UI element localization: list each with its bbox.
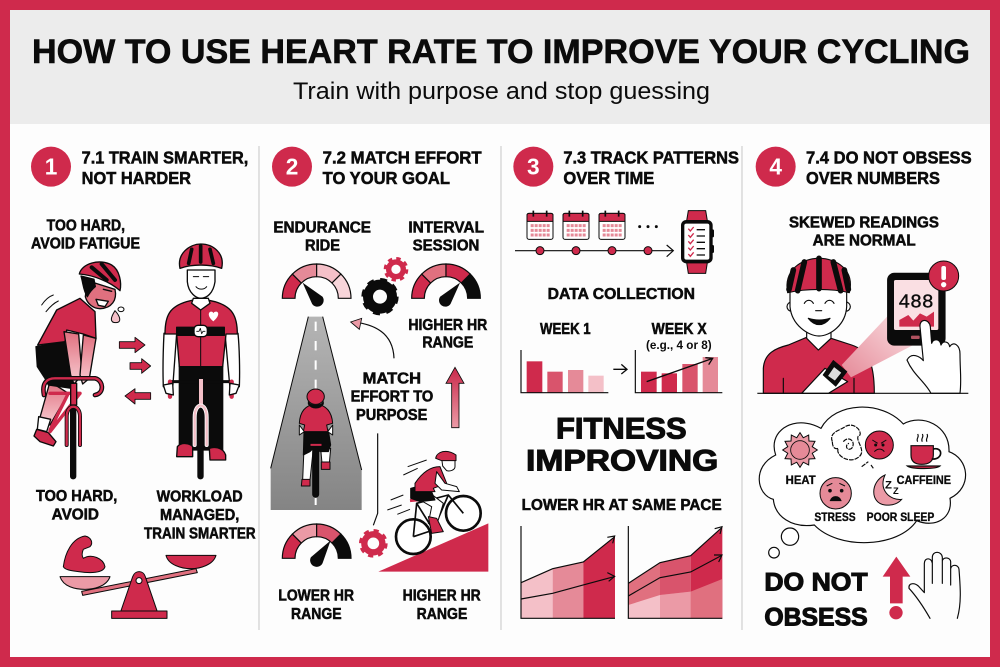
label: skewed readings (789, 214, 939, 250)
label: week x: (e.g., 4 or 8) (646, 338, 712, 352)
icon: sun (783, 433, 817, 467)
label: data collection: DATA COLLECTION (548, 286, 695, 303)
panel: 7.4 do not obsess (756, 147, 972, 632)
ellipsis (640, 222, 657, 231)
step badge 4: 4 (769, 154, 782, 180)
heading 2 (323, 147, 482, 188)
heading 1: 7.1 TRAIN SMARTER, (82, 147, 248, 167)
label: higher hr range top: HIGHER HR (408, 317, 487, 334)
label: caffeine: CAFFEINE (897, 473, 951, 487)
icon: gears (364, 259, 407, 313)
arrow: up (446, 367, 464, 428)
title: HOW TO USE HEART RATE TO IMPROVE YOUR CYCLING (32, 33, 970, 71)
panel: 7.1 train smarter (31, 147, 256, 618)
label: higher hr range bottom: HIGHER HR (403, 588, 481, 605)
icon: smartwatch checklist (681, 211, 714, 273)
headline: fitness improving: FITNESS (556, 412, 687, 445)
headline: fitness improving (526, 412, 718, 478)
heading 2: 7.2 MATCH EFFORT (323, 147, 482, 167)
step badge 3 (513, 147, 553, 187)
icon: exclamation arrow (883, 557, 910, 619)
label: endurance ride: ENDURANCE (273, 219, 371, 236)
connector line (373, 433, 378, 525)
label: week 1: WEEK 1 (540, 321, 591, 338)
road (271, 317, 362, 510)
arrow: curved to endurance (351, 318, 394, 358)
label: week x: WEEK X (652, 321, 707, 338)
sleep letters: Z (885, 479, 892, 491)
label: too hard avoid: TOO HARD, (36, 488, 117, 505)
thought cloud (759, 407, 966, 558)
sleep letters: Z (893, 486, 899, 496)
label: workload managed: MANAGED, (160, 507, 239, 524)
label: too hard avoid fatigue: TOO HARD, (47, 218, 125, 235)
icon: red gear (361, 531, 386, 556)
label: match effort to purpose: MATCH (363, 370, 421, 387)
label: match effort to purpose: EFFORT TO (351, 389, 433, 406)
icon: hill climbing rider (378, 451, 488, 572)
arrows between cyclists (119, 337, 151, 404)
gauge: lower hr (282, 524, 351, 566)
label: lower hr range (278, 588, 354, 623)
label: match effort to purpose (351, 370, 433, 424)
heading 3: OVER TIME (563, 168, 655, 188)
label: lower hr range: RANGE (291, 606, 342, 623)
headline: fitness improving: IMPROVING (526, 445, 718, 478)
icon: moon (874, 475, 902, 505)
label: skewed readings: SKEWED READINGS (789, 214, 939, 231)
gauge: interval (412, 264, 480, 306)
calendar 2 (563, 211, 589, 239)
label: higher hr range bottom (403, 588, 481, 623)
label: workload managed (144, 489, 256, 543)
label: endurance ride: RIDE (305, 238, 340, 255)
label: interval session: INTERVAL (408, 219, 484, 236)
bar chart: week x (635, 350, 722, 393)
timeline with calendars (515, 211, 673, 257)
step badge 1: 1 (45, 154, 57, 180)
label: lower hr range: LOWER HR (278, 588, 354, 605)
label: match effort to purpose: PURPOSE (356, 407, 427, 424)
icon: managed cyclist (163, 244, 240, 479)
bar chart: week 1 (521, 350, 608, 393)
label: higher hr range top (408, 317, 487, 352)
label: too hard avoid (36, 488, 117, 523)
area chart: left (521, 526, 615, 618)
calendar 1 (527, 211, 553, 239)
icon: stressed face (820, 478, 851, 509)
sleep letters (885, 479, 899, 496)
gauge: endurance (282, 264, 351, 306)
icon: scribble of thoughts (832, 425, 873, 468)
label: lower hr at same pace: LOWER HR AT SAME PACE (522, 497, 722, 514)
label: workload managed: TRAIN SMARTER (144, 526, 256, 543)
label: heat: HEAT (786, 473, 816, 487)
headline: do not obsess: DO NOT (764, 569, 868, 597)
label: workload managed: WORKLOAD (157, 489, 243, 506)
panel: 7.3 track patterns (513, 147, 739, 618)
step badge 2: 2 (286, 154, 298, 180)
icon: exhausted cyclist (34, 262, 124, 479)
heading 1: NOT HARDER (82, 168, 191, 188)
icon: alert badge (929, 261, 959, 291)
label: stress: STRESS (814, 510, 856, 524)
label: endurance ride (273, 219, 371, 255)
icon: coffee cup (907, 434, 941, 468)
heading 4: 7.4 DO NOT OBSESS (806, 147, 972, 167)
heading 3 (563, 147, 739, 188)
header band (10, 10, 990, 124)
label: interval session: SESSION (413, 238, 479, 255)
heading 4: OVER NUMBERS (806, 168, 940, 188)
label: too hard avoid fatigue: AVOID FATIGUE (31, 235, 140, 252)
heading 1 (82, 147, 248, 188)
heading 3: 7.3 TRACK PATTERNS (563, 147, 739, 167)
reading on device: 488 (898, 291, 934, 313)
step badge 1 (31, 147, 71, 187)
icon: stop hand (909, 552, 960, 618)
panel: 7.2 match effort (271, 147, 488, 623)
label: week x (646, 321, 712, 352)
label: poor sleep: POOR SLEEP (867, 510, 934, 524)
label: interval session (408, 219, 484, 255)
icon: smiling rider with watch (763, 258, 961, 393)
label: too hard avoid fatigue (31, 218, 140, 252)
step badge 2 (272, 147, 312, 187)
label: too hard avoid: AVOID (52, 506, 99, 523)
area chart: right (628, 526, 722, 618)
step badge 4 (756, 147, 796, 187)
headline: do not obsess: OBSESS (764, 604, 868, 632)
label: higher hr range top: RANGE (422, 335, 473, 352)
heading 2: TO YOUR GOAL (323, 168, 450, 188)
label: skewed readings: ARE NORMAL (813, 233, 916, 250)
step badge 3: 3 (527, 154, 540, 180)
heading 4 (806, 147, 972, 188)
calendar 3 (599, 211, 625, 239)
headline: do not obsess (764, 569, 868, 632)
icon: rider from behind (299, 389, 333, 497)
arrow: week comparison (613, 364, 627, 374)
icon: balance scale with muscle (60, 536, 216, 618)
label: higher hr range bottom: RANGE (417, 606, 467, 623)
subtitle: Train with purpose and stop guessing (293, 78, 710, 105)
icon: angry face (865, 431, 893, 459)
